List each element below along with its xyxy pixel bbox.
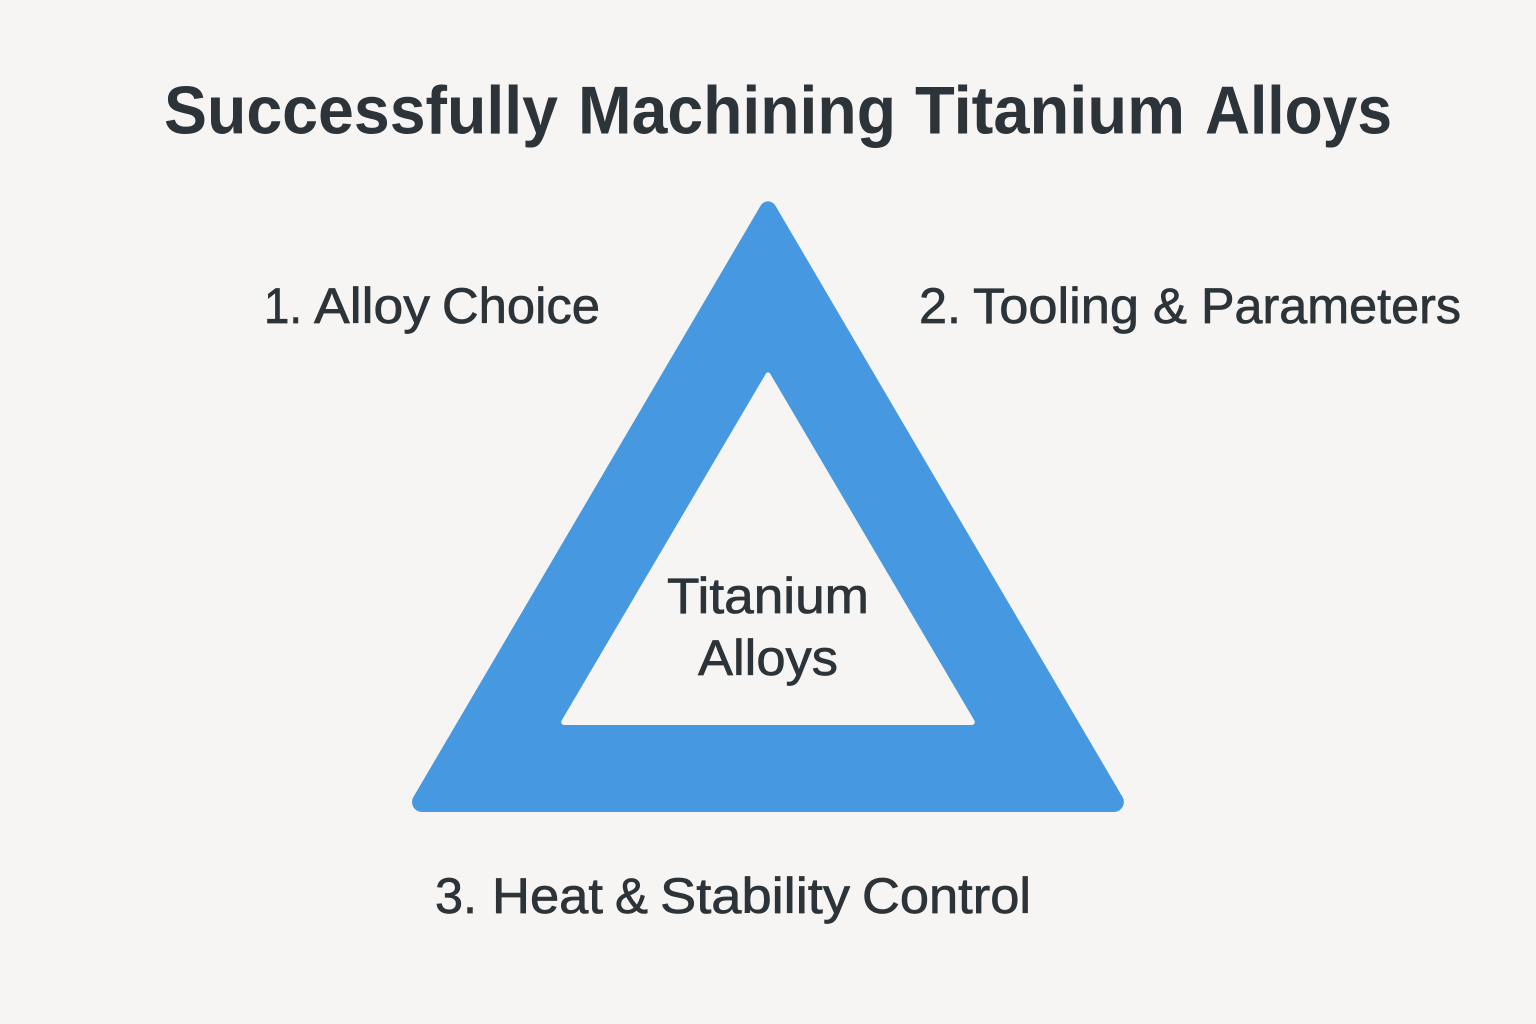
label: heat and stability control: Stability [660,868,850,924]
center label [667,568,869,686]
label: tooling and parameters: Tooling [973,278,1139,334]
outer blue triangle with inner cutout [412,201,1124,812]
title: Titanium [915,72,1185,148]
label: tooling and parameters [919,278,1461,334]
label: heat and stability control: 3. [435,868,477,924]
label: heat and stability control: Control [862,868,1031,924]
label: tooling and parameters: Parameters [1201,278,1461,334]
label: alloy choice [264,278,600,334]
label: heat and stability control: Heat [492,868,603,924]
title: Alloys [1205,72,1392,148]
label: alloy choice: 1. [264,278,302,334]
label: tooling and parameters: 2. [919,278,961,334]
center label: Titanium [667,568,869,624]
label: heat and stability control [435,868,1031,924]
label: alloy choice: Choice [442,278,600,334]
label: heat and stability control: & [615,868,648,924]
title [164,72,1392,148]
center label: Alloys [698,630,838,686]
title: Successfully [164,72,558,148]
title: Machining [578,72,896,148]
label: tooling and parameters: & [1153,278,1187,334]
triangle diagram [412,201,1124,812]
label: alloy choice: Alloy [314,278,430,334]
